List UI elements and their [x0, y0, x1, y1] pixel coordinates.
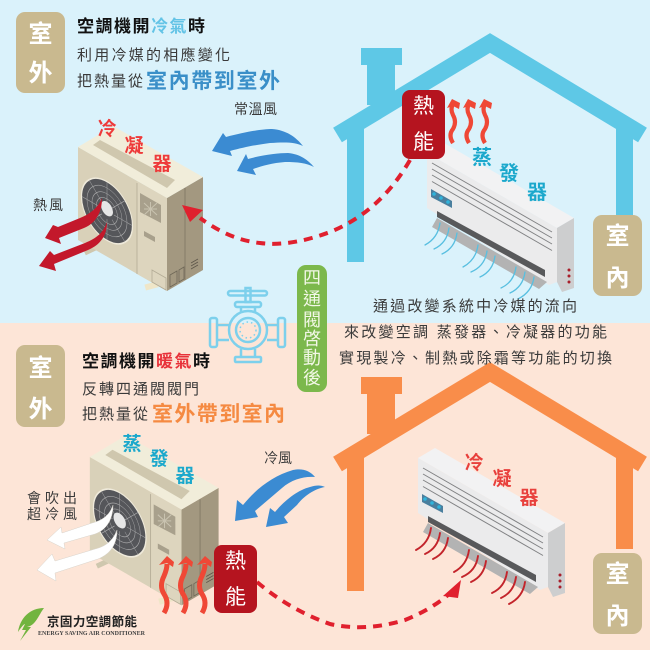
panel: heating background	[0, 323, 650, 650]
badge: outdoor top: 室	[28, 20, 52, 48]
badge: heat energy bottom: 熱	[225, 550, 246, 573]
badge: heat energy top: 能	[413, 131, 434, 154]
label: evaporator on indoor unit: 蒸	[472, 146, 492, 169]
badge: after four-way valve activates	[297, 265, 327, 392]
badge: heat energy top	[402, 90, 445, 159]
text: moves heat outdoors to indoors: 把熱量從	[82, 406, 148, 423]
badge: after four-way valve activates: 閥	[303, 310, 321, 330]
label: evaporator on outdoor unit	[122, 433, 195, 487]
logo: energy saving air conditioner: 京固力空調節能	[47, 614, 137, 629]
label: hot air: 熱風	[33, 197, 63, 213]
text block: explanation: 實現製冷、制熱或除霜等功能的切換	[339, 349, 612, 367]
icon: rising heat waves	[447, 99, 492, 143]
house: heating mode	[338, 372, 642, 591]
panel: cooling background	[0, 0, 650, 323]
badge: after four-way valve activates: 啓	[303, 329, 321, 349]
label: condenser on outdoor unit: 凝	[124, 135, 144, 157]
badge: indoor top: 內	[606, 265, 630, 292]
text: moves heat indoors to outdoors	[77, 69, 280, 93]
badge: outdoor bottom: 室	[28, 354, 52, 382]
logo: energy saving air conditioner: ENERGY SAVING AIR CONDITIONER	[38, 631, 146, 637]
label: condenser on indoor unit: 凝	[492, 468, 512, 490]
label: evaporator on indoor unit: 發	[499, 162, 519, 185]
label: condenser on outdoor unit: 冷	[97, 118, 117, 140]
indoor unit: cooling mode evaporator	[427, 143, 574, 292]
label: super cold air	[27, 490, 77, 522]
badge: outdoor top: 外	[28, 60, 52, 87]
badge: after four-way valve activates: 後	[303, 368, 321, 388]
house: cooling mode	[338, 43, 642, 262]
indoor unit: heating mode condenser	[418, 448, 565, 597]
heading: cooling mode: 空調機開冷氣時	[77, 16, 205, 36]
badge: heat energy top: 熱	[413, 95, 434, 118]
dashed arrow: heat to indoors	[257, 580, 461, 627]
badge: indoor bottom: 室	[606, 560, 630, 588]
label: condenser on outdoor unit	[97, 118, 172, 175]
label: condenser on indoor unit	[464, 452, 539, 509]
text block: explanation	[339, 298, 612, 367]
label: evaporator on outdoor unit: 器	[175, 466, 195, 487]
badge: after four-way valve activates: 動	[303, 348, 321, 368]
badge: indoor bottom	[593, 553, 642, 634]
arrows: cold air	[235, 469, 325, 527]
text: moves heat outdoors to indoors: 室外帶到室內	[152, 402, 285, 426]
label: condenser on outdoor unit: 器	[152, 154, 172, 175]
text: moves heat indoors to outdoors: 把熱量從	[77, 73, 143, 90]
label: super cold air: 超冷風	[27, 506, 77, 522]
text: reverse four-way valve: 反轉四通閥閥門	[82, 381, 199, 398]
badge: indoor bottom: 內	[606, 603, 630, 630]
cold air lines	[425, 223, 534, 299]
label: evaporator on indoor unit: 器	[527, 182, 547, 204]
arrows: room temperature air	[212, 129, 314, 175]
arrows: super cold air	[37, 505, 117, 581]
badge: outdoor bottom	[16, 345, 65, 427]
label: super cold air: 會吹出	[27, 490, 77, 506]
arrows: hot air	[39, 198, 107, 271]
badge: heat energy bottom	[214, 545, 257, 613]
label: room temperature air: 常溫風	[234, 101, 277, 117]
label: condenser on indoor unit: 冷	[464, 452, 484, 474]
badge: after four-way valve activates: 四	[303, 268, 321, 288]
label: evaporator on outdoor unit: 蒸	[122, 433, 142, 455]
badge: indoor top	[593, 215, 642, 296]
text: moves heat indoors to outdoors: 室內帶到室外	[146, 69, 280, 93]
dashed arrow: heat to outdoors	[182, 160, 410, 244]
warm air lines	[416, 528, 525, 604]
text: refrigerant phase change: 利用冷媒的相應變化	[77, 46, 230, 64]
badge: heat energy bottom: 能	[225, 586, 246, 609]
label: cold air: 冷風	[264, 450, 292, 466]
heading: heating mode: 空調機開暖氣時	[82, 351, 210, 371]
outdoor unit: cooling mode condenser	[78, 126, 203, 291]
text block: explanation: 來改變空調 蒸發器、冷凝器的功能	[344, 324, 607, 341]
icon: four-way valve	[210, 288, 285, 362]
text block: explanation: 通過改變系統中冷媒的流向	[373, 298, 577, 315]
badge: outdoor top	[16, 12, 65, 93]
badge: indoor top: 室	[606, 222, 630, 250]
label: condenser on indoor unit: 器	[519, 488, 539, 509]
label: evaporator on outdoor unit: 發	[149, 448, 169, 470]
text: moves heat outdoors to indoors	[82, 402, 285, 426]
icon: rising heat into outdoor unit	[159, 556, 212, 613]
label: evaporator on indoor unit	[472, 146, 547, 204]
badge: outdoor bottom: 外	[28, 396, 52, 423]
logo: energy saving air conditioner	[18, 608, 146, 641]
badge: after four-way valve activates: 通	[303, 289, 321, 309]
outdoor unit: heating mode evaporator	[90, 435, 219, 605]
